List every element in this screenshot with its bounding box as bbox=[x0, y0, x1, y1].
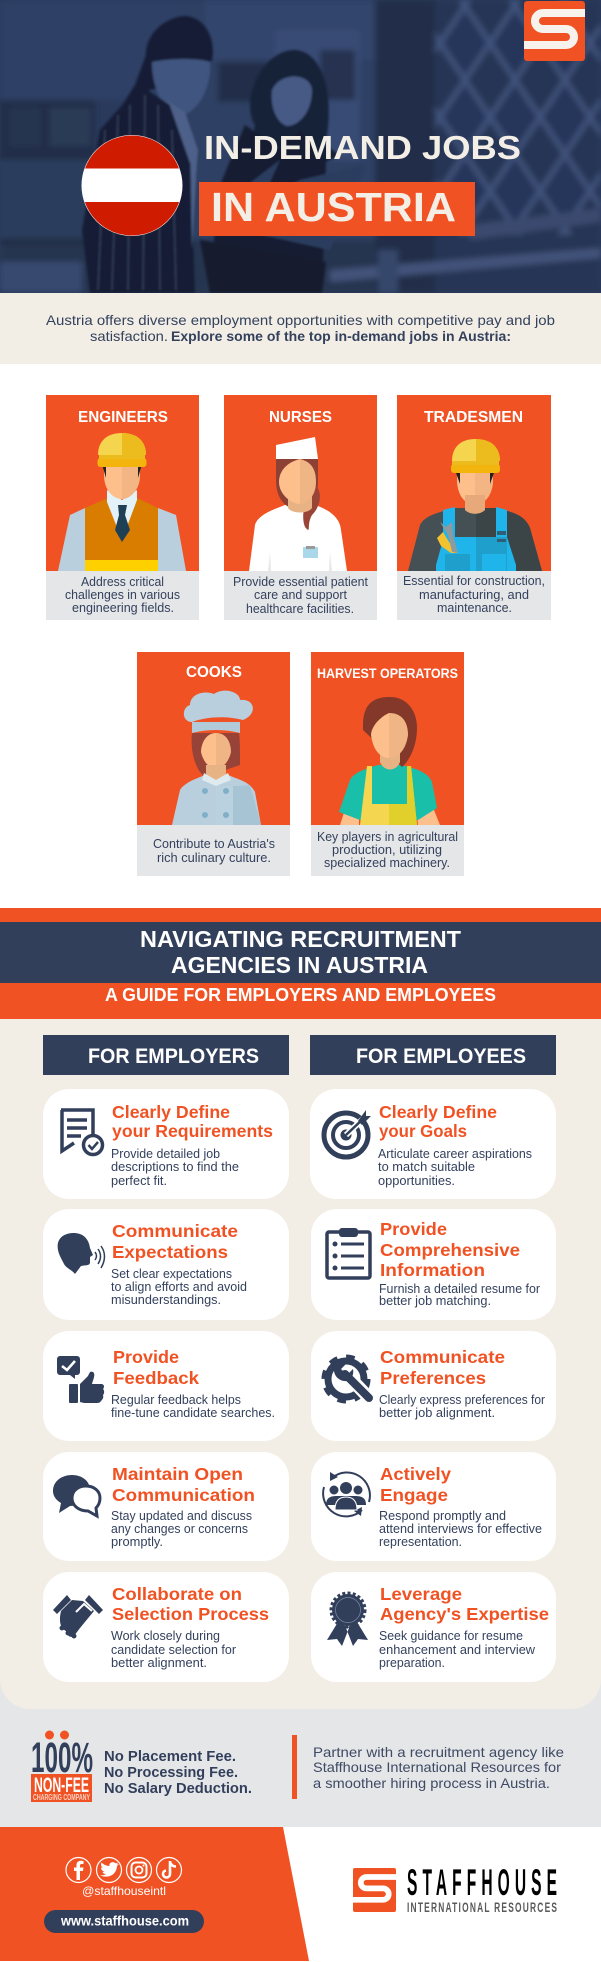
intro panel: Austria offers diverse employment opportunities with competitive pay and job bbox=[46, 312, 555, 328]
card: clearly define your goals: to match suitable bbox=[378, 1160, 475, 1174]
card: provide comprehensive information: Furnish a detailed resume for bbox=[379, 1282, 540, 1296]
section header: navigating recruitment agencies: AGENCIES IN AUSTRIA bbox=[171, 952, 428, 978]
heading: for employers: FOR EMPLOYERS bbox=[88, 1045, 259, 1068]
card: clearly define your requirements bbox=[43, 1089, 289, 1199]
card: communicate preferences bbox=[311, 1331, 556, 1441]
logo: staffhouse international resources bbox=[353, 1862, 557, 1916]
description: engineers: challenges in various bbox=[65, 588, 180, 602]
description: harvest operators bbox=[317, 830, 458, 870]
icon: gear and wrench bbox=[324, 1357, 369, 1401]
card: clearly define your goals: opportunities. bbox=[378, 1174, 455, 1188]
icon: clipboard bbox=[327, 1228, 370, 1278]
card: communicate expectations: misunderstandings. bbox=[111, 1293, 221, 1307]
illustration: nurse bbox=[249, 437, 347, 571]
text: no fees: No Salary Deduction. bbox=[104, 1781, 252, 1797]
card: collaborate on selection process: Work closely during bbox=[111, 1629, 220, 1643]
woman left bbox=[82, 16, 213, 293]
intro panel: Explore some of the top in-demand jobs in Austria: bbox=[171, 328, 511, 344]
card: provide feedback: Feedback bbox=[113, 1368, 199, 1388]
description: engineers: engineering fields. bbox=[72, 601, 174, 615]
website pill bbox=[44, 1910, 204, 1933]
illustration: tradesman bbox=[408, 439, 542, 571]
card: actively engage: representation. bbox=[379, 1535, 462, 1549]
description: nurses: Provide essential patient bbox=[233, 575, 369, 589]
intro panel bbox=[0, 293, 601, 364]
card: clearly define your requirements: descriptions to find the bbox=[111, 1160, 239, 1174]
text: partner call to action bbox=[313, 1744, 564, 1791]
hero banner bbox=[0, 0, 601, 293]
website pill: www.staffhouse.com bbox=[60, 1914, 189, 1928]
card: communicate preferences: Communicate bbox=[380, 1347, 505, 1367]
badge: 100% non-fee charging company: CHARGING COMPANY bbox=[33, 1793, 90, 1802]
card: maintain open communication: Maintain Open bbox=[112, 1464, 243, 1484]
description: nurses bbox=[233, 575, 369, 616]
description: harvest operators: Key players in agricultural bbox=[317, 830, 458, 844]
description: harvest operators: production, utilizing bbox=[332, 843, 442, 857]
card: actively engage: Engage bbox=[380, 1485, 448, 1505]
panel: harvest operators bbox=[311, 652, 464, 876]
card: provide comprehensive information: Comprehensive bbox=[380, 1240, 520, 1260]
card: clearly define your goals: your Goals bbox=[379, 1121, 467, 1141]
description: cooks: rich culinary culture. bbox=[157, 851, 271, 865]
section header: navigating recruitment agencies bbox=[0, 908, 601, 1019]
text: partner call to action: Staffhouse International Resources for bbox=[313, 1759, 561, 1775]
icon: handshake bbox=[53, 1595, 103, 1638]
card: provide comprehensive information: Provide bbox=[380, 1219, 447, 1239]
grey closing band background bbox=[0, 1660, 601, 1827]
card: provide feedback bbox=[43, 1331, 289, 1441]
card: leverage agency's expertise bbox=[311, 1572, 556, 1682]
card: actively engage: attend interviews for effective bbox=[379, 1522, 542, 1536]
card: clearly define your goals: Clearly Define bbox=[379, 1102, 497, 1122]
card: collaborate on selection process: better alignment. bbox=[111, 1656, 207, 1670]
logo: staffhouse international resources: STAFFHOUSE bbox=[407, 1862, 557, 1904]
text: no fees: No Placement Fee. bbox=[104, 1749, 236, 1765]
card: leverage agency's expertise: enhancement and interview bbox=[379, 1643, 536, 1657]
card: collaborate on selection process: Collaborate on bbox=[112, 1584, 242, 1604]
card: communicate preferences: Clearly express preferences for bbox=[379, 1393, 545, 1407]
card: leverage agency's expertise: Leverage bbox=[380, 1584, 462, 1604]
icon: austrian flag bbox=[80, 134, 184, 238]
card: provide comprehensive information: better job matching. bbox=[379, 1294, 491, 1308]
card: actively engage: Actively bbox=[380, 1464, 451, 1484]
icon: people with cycle arrows bbox=[323, 1472, 370, 1516]
heading: for employees bbox=[310, 1035, 556, 1075]
heading: cooks: COOKS bbox=[186, 664, 242, 681]
icon: twitter bbox=[96, 1858, 122, 1882]
icon: speaking head bbox=[58, 1233, 104, 1274]
illustration: engineer bbox=[58, 433, 186, 571]
card: communicate preferences: Preferences bbox=[380, 1368, 486, 1388]
card: leverage agency's expertise: Seek guidance for resume bbox=[379, 1629, 523, 1643]
card: leverage agency's expertise: preparation. bbox=[379, 1656, 445, 1670]
card: communicate expectations: Set clear expectations bbox=[111, 1267, 232, 1281]
icon: ribbon award bbox=[327, 1593, 368, 1646]
heading: tradesmen: TRADESMEN bbox=[424, 409, 523, 426]
card: leverage agency's expertise: Agency's Expertise bbox=[380, 1604, 549, 1624]
card: collaborate on selection process bbox=[43, 1572, 289, 1682]
description: tradesmen bbox=[403, 574, 545, 615]
text: partner call to action: Partner with a recruitment agency like bbox=[313, 1744, 564, 1760]
icon: feedback thumbs up bbox=[57, 1356, 104, 1403]
card: actively engage: Respond promptly and bbox=[379, 1509, 506, 1523]
card: provide comprehensive information: Information bbox=[380, 1260, 485, 1280]
icon: staffhouse logo bbox=[524, 1, 585, 61]
heading: engineers: ENGINEERS bbox=[78, 409, 168, 426]
card: clearly define your requirements: Provide detailed job bbox=[111, 1147, 220, 1161]
card: provide feedback: fine-tune candidate searches. bbox=[111, 1406, 275, 1420]
card: actively engage bbox=[311, 1452, 556, 1561]
card: collaborate on selection process: candidate selection for bbox=[111, 1643, 236, 1657]
card: maintain open communication: any changes or concerns bbox=[111, 1522, 248, 1536]
heading: nurses: NURSES bbox=[269, 409, 332, 426]
description: engineers: Address critical bbox=[81, 575, 164, 589]
card: collaborate on selection process: Selection Process bbox=[112, 1604, 269, 1624]
text: no fees bbox=[104, 1749, 252, 1797]
card: clearly define your goals bbox=[310, 1089, 556, 1199]
card: maintain open communication bbox=[43, 1452, 289, 1561]
card: clearly define your requirements: your Requirements bbox=[112, 1121, 273, 1141]
icon: instagram bbox=[126, 1858, 152, 1882]
icon: document check bbox=[61, 1110, 102, 1154]
icon: tiktok bbox=[156, 1858, 182, 1882]
badge: 100% non-fee charging company: 100% bbox=[31, 1734, 93, 1782]
icon: target bbox=[324, 1110, 371, 1157]
illustration: cook bbox=[172, 691, 261, 825]
divider bar bbox=[292, 1735, 297, 1799]
illustration: harvest operator bbox=[339, 697, 440, 825]
footer panel bbox=[0, 1827, 601, 1962]
panel: nurses bbox=[224, 395, 377, 620]
panel: tradesmen bbox=[397, 395, 551, 620]
logo: staffhouse international resources: INTERNATIONAL RESOURCES bbox=[407, 1901, 557, 1916]
intro panel: satisfaction. bbox=[90, 328, 168, 344]
icon: chat bubbles bbox=[53, 1475, 100, 1516]
description: engineers bbox=[65, 575, 180, 615]
text: social handle: @staffhouseintl bbox=[82, 1884, 166, 1898]
card: provide comprehensive information bbox=[311, 1209, 556, 1320]
icon: facebook bbox=[66, 1858, 91, 1882]
card: clearly define your requirements: perfect fit. bbox=[111, 1174, 167, 1188]
panel: guide background bbox=[0, 1019, 601, 1709]
section header: navigating recruitment agencies: A GUIDE FOR EMPLOYERS AND EMPLOYEES bbox=[105, 985, 496, 1005]
card: clearly define your goals: Articulate career aspirations bbox=[378, 1147, 532, 1161]
heading: harvest operators: HARVEST OPERATORS bbox=[317, 666, 458, 681]
panel: cooks bbox=[137, 652, 290, 876]
description: harvest operators: specialized machinery. bbox=[324, 856, 450, 870]
card: maintain open communication: Communication bbox=[112, 1485, 255, 1505]
card: clearly define your requirements: Clearly Define bbox=[112, 1102, 230, 1122]
description: cooks bbox=[153, 837, 275, 865]
card: maintain open communication: promptly. bbox=[111, 1535, 163, 1549]
card: communicate expectations bbox=[43, 1209, 289, 1320]
text: no fees: No Processing Fee. bbox=[104, 1765, 238, 1781]
description: nurses: care and support bbox=[254, 588, 348, 602]
card: provide feedback: Provide bbox=[113, 1347, 179, 1367]
description: cooks: Contribute to Austria's bbox=[153, 837, 275, 851]
card: communicate expectations: Communicate bbox=[112, 1221, 238, 1241]
panel: engineers bbox=[46, 395, 199, 620]
description: nurses: healthcare facilities. bbox=[246, 602, 354, 616]
description: tradesmen: Essential for construction, bbox=[403, 574, 545, 588]
woman right bbox=[200, 50, 365, 293]
text: partner call to action: a smoother hiring process in Austria. bbox=[313, 1775, 550, 1791]
card: provide feedback: Regular feedback helps bbox=[111, 1393, 241, 1407]
card: maintain open communication: Stay updated and discuss bbox=[111, 1509, 252, 1523]
section header: navigating recruitment agencies: NAVIGATING RECRUITMENT bbox=[140, 926, 461, 952]
card: communicate expectations: Expectations bbox=[112, 1242, 228, 1262]
description: tradesmen: maintenance. bbox=[437, 601, 512, 615]
card: communicate expectations: to align efforts and avoid bbox=[111, 1280, 247, 1294]
heading: for employees: FOR EMPLOYEES bbox=[356, 1045, 526, 1068]
heading: for employers bbox=[43, 1035, 289, 1075]
badge: 100% non-fee charging company bbox=[31, 1730, 93, 1802]
title: in-demand jobs: IN-DEMAND JOBS bbox=[204, 129, 521, 166]
description: tradesmen: manufacturing, and bbox=[419, 588, 529, 602]
badge: 100% non-fee charging company: NON-FEE bbox=[34, 1774, 89, 1797]
title box: in austria: IN AUSTRIA bbox=[211, 184, 456, 230]
card: communicate preferences: better job alignment. bbox=[379, 1406, 495, 1420]
